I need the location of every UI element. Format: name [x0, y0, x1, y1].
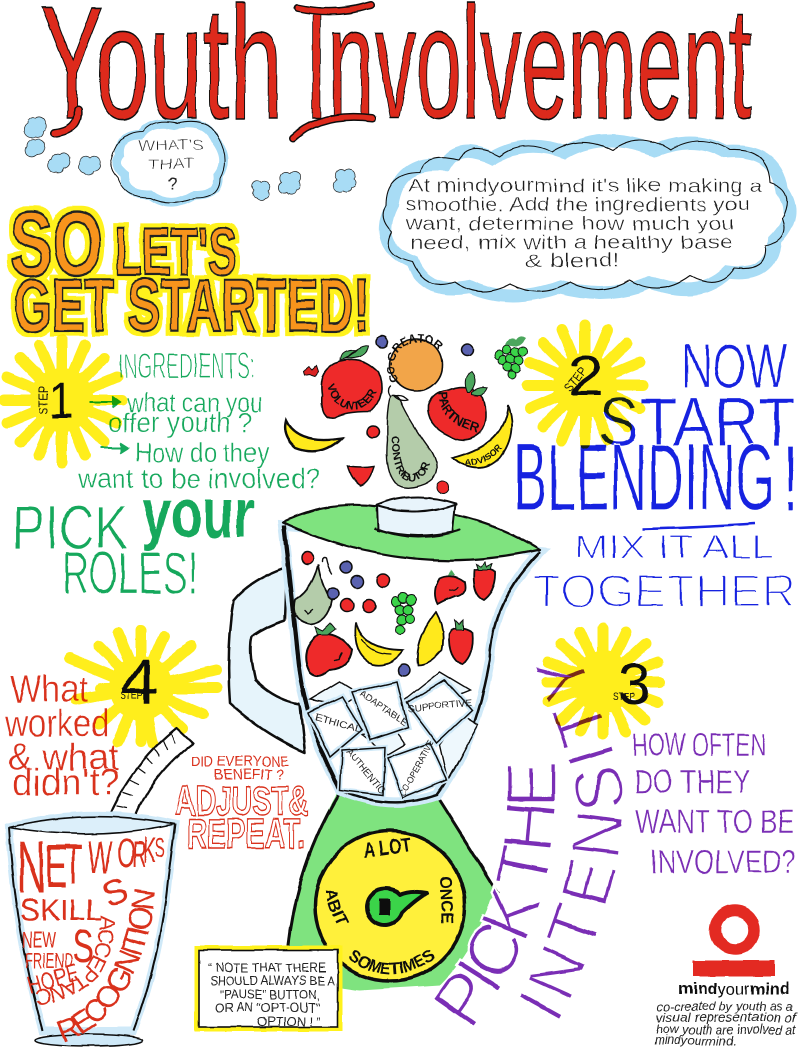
- glass words: R: [132, 835, 147, 876]
- credit text: how youth are involved at: [656, 1023, 797, 1037]
- icon: step 1 sun: [4, 340, 122, 462]
- fruit: strawberry and berries: [303, 336, 473, 493]
- glass words: E: [45, 834, 67, 901]
- glass words: HOPE: [24, 959, 82, 1000]
- glass words: FRIEND: [25, 950, 73, 973]
- step 4 text: what worked: didn't?: [12, 762, 120, 804]
- heading: so let's get started: GET STARTED!: [14, 264, 370, 347]
- big cloud: smoothie explanation: smoothie. Add the ingredients you: [405, 195, 750, 216]
- icon: step 2 sun: [527, 325, 643, 443]
- big cloud: smoothie explanation: need, mix with a healthy base: [410, 233, 733, 254]
- ice cube: ethical: [308, 697, 362, 757]
- fruit: partner apple: [389, 338, 509, 470]
- icon: step 3 sun: [547, 628, 659, 734]
- adjust and repeat: BENEFIT ?: [214, 767, 284, 783]
- glass words: O: [117, 830, 135, 877]
- speed dial: A LOT: [361, 833, 412, 863]
- ice cube: authentic: AUTHENTIC: [344, 747, 388, 796]
- small cloud: what's that: [111, 121, 225, 203]
- fruit: grapes: [494, 336, 528, 379]
- glass words: S: [72, 920, 94, 972]
- blender handle: [229, 567, 305, 752]
- glass words: [8, 728, 194, 1047]
- blender base: [288, 790, 498, 990]
- adjust and repeat: REPEAT.: [187, 810, 305, 857]
- step 2 text: start blending: TOGETHER: [532, 565, 796, 617]
- fruit: co-creator orange: CO-CREATOR: [387, 334, 443, 382]
- icon: step 1 sun: 1: [49, 372, 73, 430]
- dial knob: [367, 889, 427, 925]
- note box: OR AN "OPT-OUT": [215, 1001, 320, 1015]
- step 3 text: how often: DO THEY: [634, 763, 750, 800]
- glass words: SKILL: [20, 894, 102, 927]
- ice cube: supportive: SUPPORTIVE: [407, 697, 472, 715]
- glass words: K: [143, 831, 157, 872]
- note box: [197, 948, 340, 1029]
- big cloud: smoothie explanation: & blend!: [525, 251, 620, 272]
- glass of benefits: [4, 728, 194, 1047]
- icon: step 4 sun: STEP: [120, 690, 143, 702]
- glass words: N: [17, 826, 46, 909]
- fruit: co-creator orange: [387, 334, 486, 432]
- heading: so let's get started: [10, 193, 370, 347]
- adjust and repeat: DID EVERYONE: [191, 754, 289, 770]
- blender: [227, 456, 551, 991]
- small cloud: what's that: WHAT'S: [138, 137, 204, 154]
- step 1 text: ingredients: How do they: [135, 437, 269, 468]
- heading: pick your roles: [12, 474, 254, 607]
- jar contents: fruit: [294, 552, 496, 676]
- icon: step 3 sun: 3: [618, 652, 651, 717]
- blender jar: [283, 525, 540, 802]
- fruit: volunteer apple: VOLUNTEER: [328, 383, 378, 410]
- adjust and repeat: [175, 754, 309, 857]
- speed dial: ONCE: [436, 875, 457, 924]
- heading: pick your roles: your: [142, 474, 254, 552]
- icon: step 2 sun: STEP: [562, 365, 589, 394]
- glass words: W: [88, 831, 112, 883]
- heading: pick your roles: PICK: [12, 494, 128, 563]
- big cloud: smoothie explanation: At mindyourmind it's like making a: [408, 176, 764, 197]
- heading: so let's get started: SO: [10, 193, 102, 295]
- icon: step 2 sun: 2: [568, 344, 604, 407]
- note box: "PAUSE" BUTTON,: [220, 988, 320, 1002]
- fruit: contributor pear: [346, 385, 478, 522]
- ice cube: adaptable: ADAPTABLE: [358, 688, 409, 728]
- ice cube: supportive: [407, 680, 472, 743]
- step 4 text: what worked: What: [10, 669, 88, 711]
- step 4 text: what worked: & what: [8, 737, 119, 779]
- small cloud: what's that: ?: [168, 174, 177, 193]
- credit text: [654, 1000, 798, 1048]
- blender lid: [283, 497, 540, 560]
- small cloud: what's that: THAT: [148, 156, 194, 173]
- heading: pick the intensity: PICK THE: [434, 764, 556, 1026]
- speed dial: ABIT: [326, 890, 350, 924]
- ice cube: adaptable: [352, 682, 409, 740]
- credit text: co-created by youth as a: [657, 1000, 793, 1014]
- step 3 text: how often: [632, 726, 796, 880]
- step 1 text: ingredients: INGREDIENTS:: [118, 345, 255, 386]
- credit text: visual representation of: [656, 1011, 798, 1025]
- step 4 text: what worked: worked: [4, 703, 109, 745]
- title: [40, 0, 752, 152]
- step 1 text: ingredients: [77, 345, 320, 494]
- big cloud: smoothie explanation: [383, 140, 790, 296]
- glass words: S: [155, 832, 165, 863]
- fruit: volunteer apple: [284, 338, 422, 446]
- fruit: partner apple: PARTNER: [438, 392, 479, 433]
- ice cube: co-operative: [388, 739, 447, 798]
- fruit: advisor banana: [412, 369, 514, 510]
- icon: step 4 sun: 4: [120, 648, 158, 717]
- heading: pick the intensity: INTENSITY: [520, 667, 622, 1019]
- heading: pick the intensity: [434, 667, 622, 1026]
- logo: mindyourmind: [654, 910, 798, 1048]
- icon: step 4 sun: [69, 630, 217, 744]
- speed dial: SOMETIMES: [349, 950, 434, 974]
- credit text: mindyourmind.: [654, 1034, 736, 1048]
- note box: “ NOTE THAT THERE: [208, 961, 326, 975]
- big cloud: smoothie explanation: want, determine how much you: [404, 214, 735, 235]
- note box: OPTION ! ”: [257, 1015, 320, 1029]
- glass words: S: [97, 869, 133, 916]
- straw: [107, 728, 193, 823]
- step 1 text: ingredients: what can you: [126, 387, 263, 418]
- icon: step 1 sun: STEP: [36, 386, 51, 414]
- jar contents: ice cubes: [308, 672, 478, 798]
- fruit: left banana: [285, 420, 342, 451]
- step 1 text: ingredients: want to be involved?: [77, 463, 320, 494]
- heading: pick your roles: ROLES!: [62, 540, 198, 607]
- heading: so let's get started: LET'S: [115, 214, 237, 290]
- speed dial: [294, 799, 482, 991]
- thought puffs: [23, 116, 356, 200]
- step 4 text: what worked: [4, 669, 120, 804]
- note box: SHOULD ALWAYS BE A: [210, 974, 336, 988]
- logo: mindyourmind: mindyourmind: [678, 979, 790, 998]
- fruit: advisor banana: ADVISOR: [465, 444, 502, 466]
- fruit: contributor pear: CONTRIBUTOR: [392, 436, 430, 482]
- icon: step 3 sun: STEP: [613, 691, 635, 703]
- glass words: T: [63, 832, 82, 895]
- adjust and repeat: ADJUST&: [175, 777, 309, 824]
- ice cube: co-operative: CO-OPERATIVE: [398, 739, 437, 798]
- step 2 text: start blending: [513, 330, 799, 617]
- glass words: NEW: [22, 927, 56, 954]
- step 2 text: start blending: MIX IT ALL: [574, 529, 774, 565]
- step 1 text: ingredients: offer youth ?: [108, 407, 252, 438]
- fruit: ingredients falling into blender: [283, 334, 528, 534]
- glass words: RECOGNITION: [56, 889, 155, 1042]
- ice cube: ethical: ETHICAL: [313, 712, 362, 735]
